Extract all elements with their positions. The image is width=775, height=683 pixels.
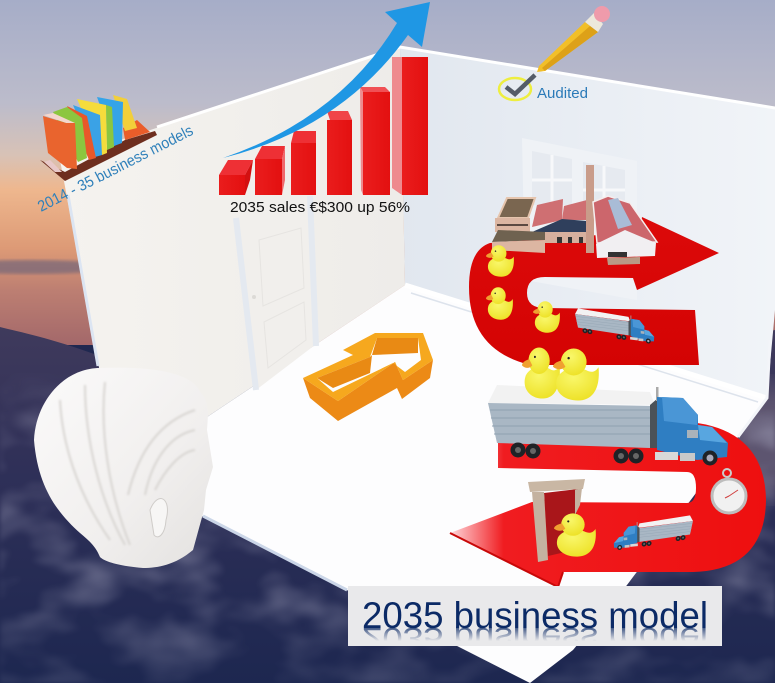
room: right wall bbox=[400, 47, 775, 398]
room: floor edges and skirting bbox=[203, 285, 770, 590]
label: Audited: Audited bbox=[537, 86, 588, 102]
lower arrow lower rim bbox=[450, 533, 563, 587]
ducks on upper arrow bbox=[486, 245, 560, 333]
truck: small, upper arrow bbox=[575, 308, 654, 344]
room: left wall outer edge bbox=[68, 195, 98, 366]
head sculpture bbox=[34, 368, 213, 568]
room: wall top edges bbox=[157, 47, 775, 127]
3D orange arrow outline bbox=[303, 333, 433, 421]
title reflection: 2035 business model bbox=[362, 621, 708, 654]
lower red arrow bbox=[450, 422, 766, 587]
growth arrow bbox=[223, 2, 430, 158]
icon: stopwatch bbox=[712, 469, 746, 513]
ducks on large truck bbox=[522, 347, 599, 401]
background: sunset sky bbox=[0, 0, 775, 345]
title text: 2035 business model bbox=[362, 595, 708, 636]
door on left wall bbox=[236, 196, 316, 390]
bookshelf icon bbox=[40, 95, 157, 181]
bar chart: sales growth bbox=[219, 57, 428, 195]
chart caption: 2035 sales €$300 up 56% bbox=[230, 199, 410, 216]
room: floor bbox=[150, 285, 767, 683]
upper red arrow bbox=[469, 217, 719, 365]
icon: factory bbox=[492, 165, 657, 265]
title panel bbox=[348, 586, 722, 646]
icon: audited check mark bbox=[499, 75, 535, 100]
duck at door bbox=[554, 513, 596, 557]
truck: small, lower arrow bbox=[614, 515, 693, 551]
room: left wall bbox=[60, 47, 405, 455]
truck: large bbox=[488, 385, 728, 466]
icon: red door bbox=[528, 479, 585, 562]
window on right wall bbox=[522, 138, 637, 300]
label: 2014 - 35 business models: 2014 - 35 business models bbox=[35, 122, 196, 216]
background: mountains and clouds bbox=[0, 327, 775, 683]
icon: pencil bbox=[537, 6, 610, 72]
background: haze band bbox=[0, 260, 115, 274]
